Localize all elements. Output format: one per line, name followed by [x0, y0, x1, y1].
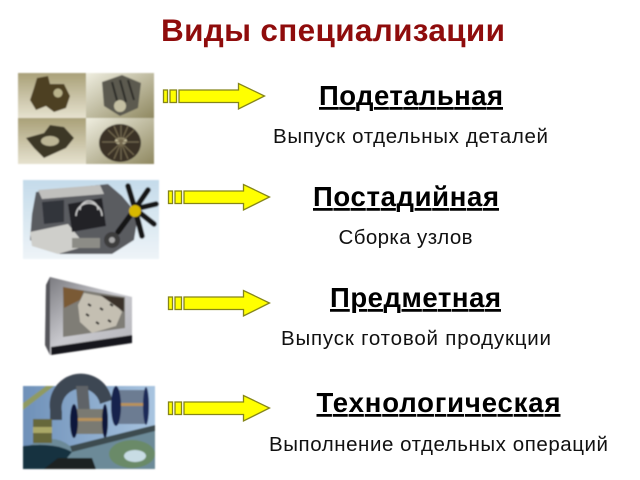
heading: Подетальная: Подетальная [319, 80, 503, 111]
heading: Технологическая: Технологическая [316, 387, 560, 418]
heading: Постадийная: Постадийная [313, 181, 499, 212]
description: Выпуск отдельных деталей: Выпуск отдельных деталей [273, 125, 548, 148]
arrow 1 [164, 84, 264, 109]
title: Виды специализации [161, 12, 505, 48]
photo: television [45, 277, 132, 355]
photo: wire spools [23, 374, 155, 469]
description: Сборка узлов: Сборка узлов [338, 226, 472, 249]
arrow 2 [168, 184, 270, 210]
photo: cast metal parts [18, 73, 154, 164]
photo: engine [23, 180, 159, 259]
heading: Предметная: Предметная [330, 282, 501, 313]
description: Выполнение отдельных операций: Выполнение отдельных операций [269, 433, 608, 456]
arrow 3 [168, 290, 270, 316]
description: Выпуск готовой продукции: Выпуск готовой продукции [281, 327, 551, 350]
arrow 4 [168, 396, 270, 421]
